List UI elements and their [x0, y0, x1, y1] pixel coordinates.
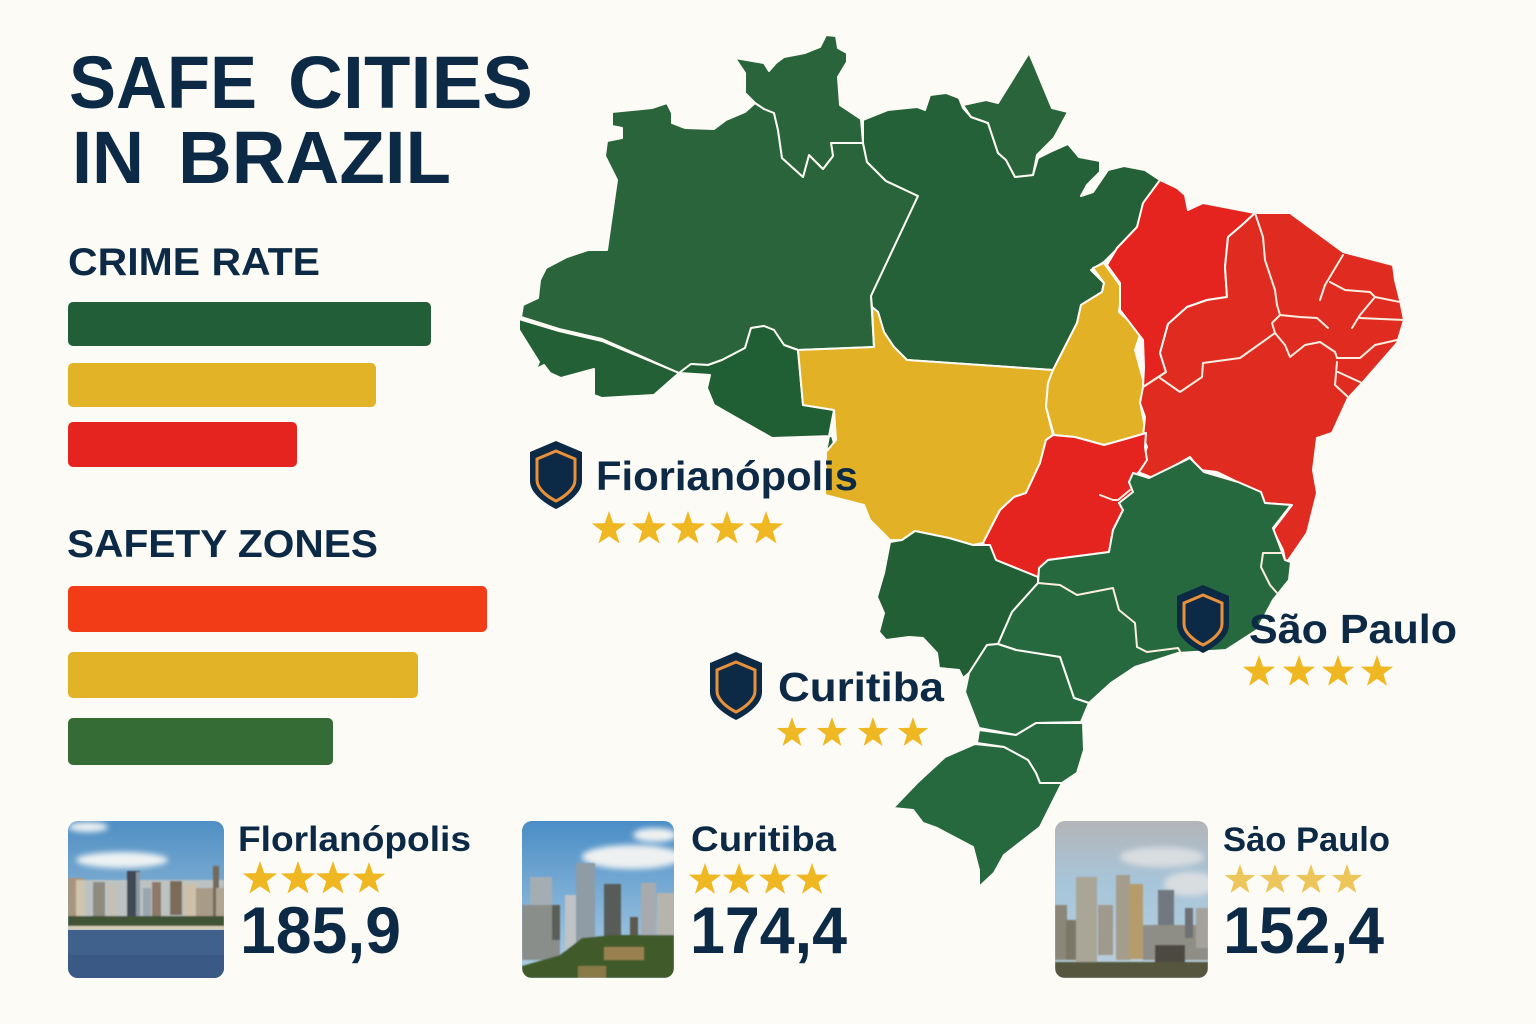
value: 152,4 — [1223, 893, 1384, 967]
rating stars — [592, 511, 783, 544]
rating stars — [689, 863, 828, 894]
panel: crime rate — [68, 241, 431, 467]
heading: safety zones: SAFETY ZONES — [67, 523, 378, 566]
rating stars — [1243, 655, 1393, 686]
map of Brazil — [519, 35, 1404, 887]
bar: green — [68, 718, 333, 765]
name: Sȧo Paulo — [1223, 821, 1390, 859]
title: BRAZIL — [178, 116, 451, 199]
rating stars — [1225, 864, 1362, 893]
label: Curitiba — [778, 664, 945, 710]
region: Para — [863, 93, 1160, 370]
label: São Paulo — [1249, 606, 1457, 652]
region: Amazonas — [521, 103, 918, 373]
photo: towers on a hill — [522, 821, 682, 978]
label: Fiorianópolis — [596, 453, 858, 499]
bar: yellow — [68, 652, 418, 698]
bar: yellow — [68, 363, 376, 407]
card: Sao Paulo — [1055, 821, 1390, 978]
icon: shield — [1177, 585, 1229, 653]
bar: orange-red — [68, 586, 487, 632]
region: Tocantins — [1046, 263, 1146, 445]
bar: green — [68, 302, 431, 346]
region: Rondonia — [679, 326, 836, 452]
card: Florlanopolis — [68, 820, 471, 978]
region: Goias — [983, 433, 1147, 577]
panel: safety zones — [67, 523, 487, 765]
region: Mato Grosso — [798, 307, 1053, 545]
region: Maranhao — [1107, 180, 1255, 387]
region: Acre — [519, 319, 679, 398]
rating stars — [243, 861, 385, 894]
icon: shield — [530, 441, 582, 509]
region: Mato Grosso do Sul — [877, 531, 1038, 678]
region: Santa Catarina — [977, 723, 1084, 783]
bar: red — [68, 422, 297, 467]
photo: waterfront skyline — [68, 821, 224, 978]
name: Curitiba — [691, 820, 837, 859]
callout: Florianopolis — [530, 441, 858, 544]
title: IN — [72, 116, 144, 199]
callout: Sao Paulo — [1177, 585, 1457, 686]
region: Parana — [965, 644, 1089, 735]
region: Minas Gerais and Sao Paulo — [998, 458, 1291, 703]
region: Rio Grande do Sul — [893, 744, 1062, 887]
value: 174,4 — [690, 893, 847, 967]
value: 185,9 — [240, 893, 401, 967]
card: Curitiba — [522, 820, 847, 978]
photo: overcast skyline — [1055, 821, 1216, 978]
callout: Curitiba — [710, 652, 945, 746]
region: Amapa — [963, 53, 1068, 177]
region: Northeast states — [1138, 213, 1404, 562]
title — [69, 41, 533, 199]
title: SAFE — [69, 41, 257, 124]
rating stars — [777, 717, 928, 746]
name: Florlanópolis — [238, 820, 471, 859]
icon: shield — [710, 652, 762, 720]
region: Roraima — [735, 35, 863, 177]
title: CITIES — [288, 41, 533, 124]
heading: crime rate: CRIME RATE — [68, 241, 320, 284]
